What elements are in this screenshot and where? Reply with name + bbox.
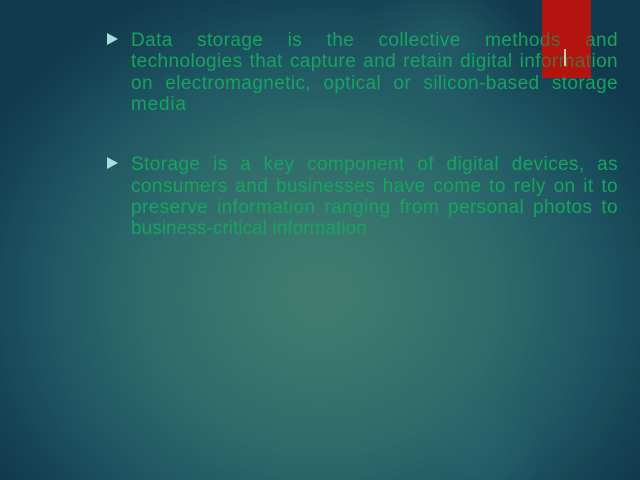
text: definition paragraph: technologies that capture and retain digital information xyxy=(131,51,618,72)
text: definition paragraph: media xyxy=(131,94,187,115)
text: importance paragraph xyxy=(131,154,618,239)
text: definition paragraph: on electromagnetic, optical or silicon-based storage xyxy=(131,73,618,94)
page number mark xyxy=(564,49,566,66)
text: definition paragraph xyxy=(131,30,618,115)
bullet: importance of storage xyxy=(107,154,618,239)
text: importance paragraph: business-critical information xyxy=(131,218,367,239)
bullet arrow xyxy=(107,33,118,45)
bullet arrow xyxy=(107,157,118,169)
text: importance paragraph: consumers and businesses have come to rely on it to xyxy=(131,176,618,197)
bullet: data storage definition xyxy=(107,30,618,115)
text: importance paragraph: preserve information ranging from personal photos to xyxy=(131,197,618,218)
text: importance paragraph: Storage is a key component of digital devices, as xyxy=(131,154,618,175)
red tab tint over text xyxy=(542,0,591,78)
text: definition paragraph: Data storage is the collective methods and xyxy=(131,30,618,51)
red page number tab xyxy=(542,0,591,78)
